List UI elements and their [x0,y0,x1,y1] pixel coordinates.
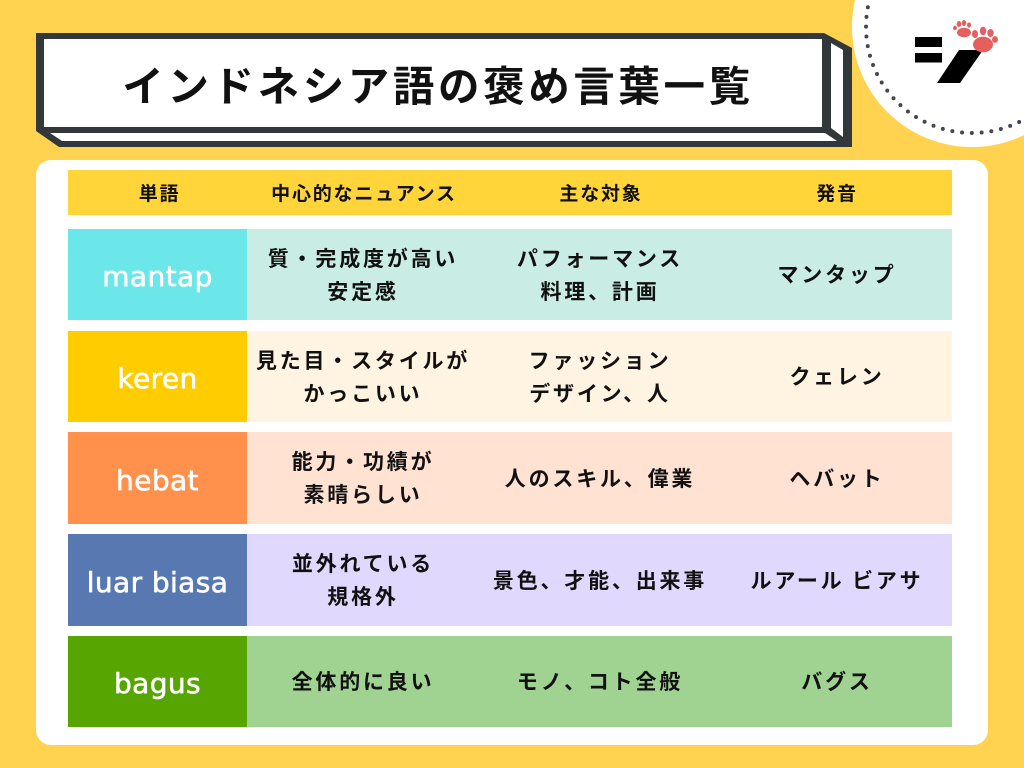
word: luar biasa: luar biasa [87,566,228,598]
nuance: luar biasa [292,548,434,611]
target: mantap [517,242,683,306]
logo badge [852,0,1024,147]
word: mantap [68,229,247,320]
nuance: keren [256,344,470,408]
header: target: 主な対象 [559,179,643,206]
nuance: keren: 見た目・スタイルが [256,344,470,374]
pronunciation: mantap: マンタップ [778,259,896,289]
nuance: mantap: 質・完成度が高い [268,242,458,272]
nuance: keren: かっこいい [303,378,422,408]
row background: hebat [247,432,952,524]
nuance: mantap [268,242,458,306]
word: keren [68,331,247,422]
row background: mantap [247,229,952,320]
header: pronunciation: 発音 [816,179,858,206]
target: mantap: 料理、計画 [540,276,660,306]
header: word: 単語 [139,179,180,206]
table header bar [68,170,952,215]
target: hebat: 人のスキル、偉業 [505,462,695,492]
word: bagus: bagus [114,667,201,700]
target: keren: ファッション [529,344,671,374]
target: mantap: パフォーマンス [517,242,683,272]
pronunciation: hebat: ヘバット [789,462,885,492]
nuance: luar biasa: 並外れている [292,548,434,578]
nuance: bagus: 全体的に良い [292,666,434,696]
word: hebat: hebat [116,464,199,496]
panel: table background [36,160,988,745]
word: keren: keren [117,362,198,395]
word: mantap: mantap [102,260,213,293]
pronunciation: keren: クェレン [790,361,884,391]
title banner [36,33,852,147]
word: luar biasa [68,534,247,626]
row background: bagus [247,636,952,727]
nuance: hebat: 能力・功績が [292,446,434,476]
word: hebat [68,432,247,524]
nuance: luar biasa: 規格外 [327,581,399,611]
row background: luar biasa [247,534,952,626]
nuance: hebat [292,446,434,509]
pronunciation: luar biasa: ルアール ビアサ [751,564,923,594]
nuance: mantap: 安定感 [327,276,399,306]
header: nuance: 中心的なニュアンス [271,179,457,206]
row background: keren [247,331,952,422]
title: インドネシア語の褒め言葉一覧 [122,53,754,113]
pronunciation: bagus: バグス [801,666,873,696]
nuance: hebat: 素晴らしい [304,479,422,509]
target: keren: デザイン、人 [529,378,671,408]
word: bagus [68,636,247,727]
target: bagus: モノ、コト全般 [517,666,683,696]
target: keren [529,344,671,408]
target: luar biasa: 景色、才能、出来事 [493,564,707,594]
